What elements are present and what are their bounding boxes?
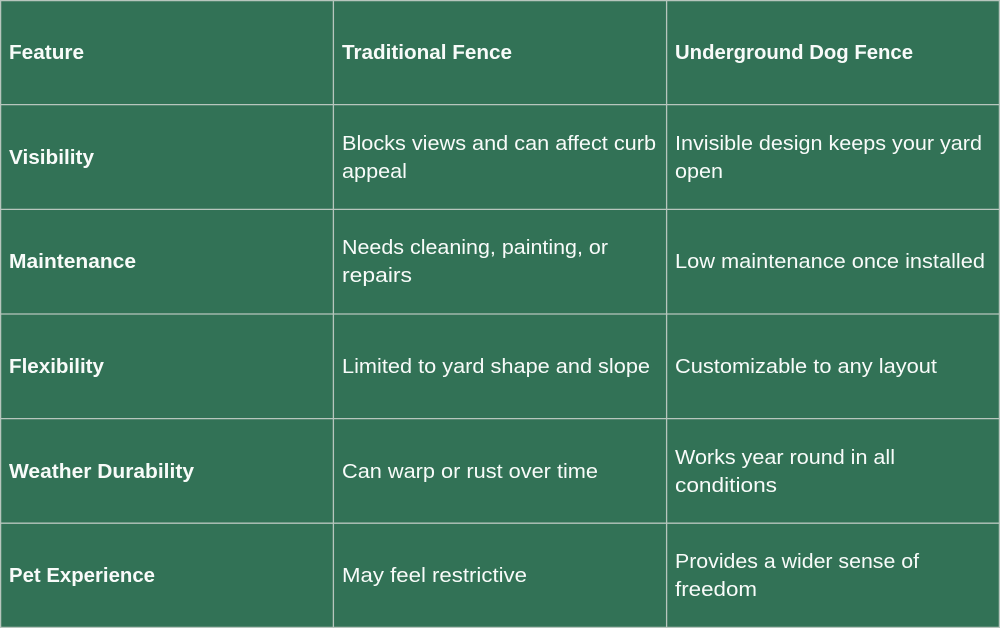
row: visibility: appeal xyxy=(342,161,407,183)
row: visibility: Blocks views and can affect curb xyxy=(342,133,656,155)
row: visibility xyxy=(9,133,982,183)
row: weather durability: Can warp or rust over time xyxy=(342,461,598,483)
row: weather durability xyxy=(9,447,895,497)
header row: Traditional Fence xyxy=(342,42,512,64)
row: visibility: Visibility xyxy=(9,147,95,169)
header row: Feature xyxy=(9,42,84,64)
row: flexibility: Flexibility xyxy=(9,356,105,378)
row: weather durability: Weather Durability xyxy=(9,461,195,483)
row: weather durability: Works year round in all xyxy=(675,447,895,469)
row: visibility: Invisible design keeps your yard xyxy=(675,133,982,155)
row: maintenance: repairs xyxy=(342,265,412,287)
row: maintenance xyxy=(9,237,985,287)
row: flexibility xyxy=(9,356,937,378)
row: flexibility: Customizable to any layout xyxy=(675,356,937,378)
row: pet experience: Provides a wider sense of xyxy=(675,551,919,573)
row: pet experience: freedom xyxy=(675,579,757,601)
row: visibility: open xyxy=(675,161,723,183)
row: pet experience xyxy=(9,551,919,601)
row: maintenance: Maintenance xyxy=(9,251,136,273)
header row xyxy=(9,42,913,64)
row: weather durability: conditions xyxy=(675,475,777,497)
row: pet experience: May feel restrictive xyxy=(342,565,527,587)
row: maintenance: Low maintenance once installed xyxy=(675,251,985,273)
row: maintenance: Needs cleaning, painting, or xyxy=(342,237,608,259)
row: flexibility: Limited to yard shape and slope xyxy=(342,356,650,378)
row: pet experience: Pet Experience xyxy=(9,565,155,587)
header row: Underground Dog Fence xyxy=(675,42,913,64)
